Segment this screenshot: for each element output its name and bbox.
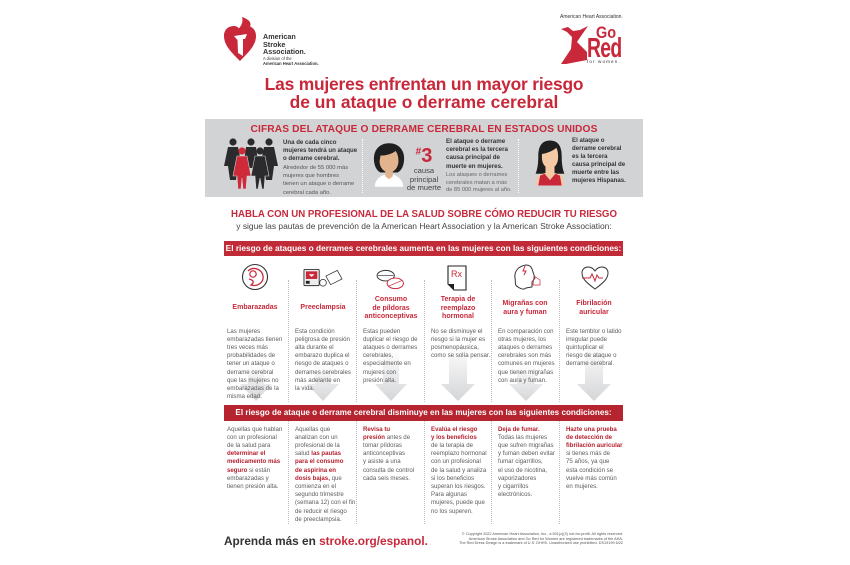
text: aquellas que hablan: determinar el [227, 450, 265, 457]
stat: #3 causa principal de muerte: de muerte [407, 183, 441, 192]
text: terapia [431, 328, 490, 359]
text: presion: tomar píldoras [363, 442, 402, 449]
text: embarazadas: misma edad. [227, 393, 262, 400]
text: fibrilacion prueba: fibrilación auricular [566, 442, 623, 449]
stat detail: 55 000 mujeres: cerebral cada año. [283, 190, 331, 196]
heading: preeclampsia: Preeclampsia [300, 304, 346, 311]
text: aquellas que hablan: de la salud para [227, 442, 270, 449]
stat text: una de cada cinco: mujeres tendrá un ataque [283, 147, 357, 154]
stat text: tercera causa: cerebral es la tercera [446, 146, 508, 153]
text: aquellas que hablan [227, 426, 282, 490]
stat text: mujeres hispanas: mujeres Hispanas. [572, 177, 626, 184]
text: fibrilacion: Este temblor o latido [566, 328, 622, 334]
text: evalua: y los beneficios [431, 434, 477, 441]
title: de un ataque o derrame cerebral [290, 92, 558, 112]
subheading: habla con un profesional: HABLA CON UN PROFESIONAL DE LA SALUD SOBRE CÓMO REDUCIR TU RIESGO [231, 209, 617, 220]
copyright: American Stroke Association and Go Red for Women are registered trademarks of the AHA. [469, 537, 623, 541]
stat text: una de cada cinco: o derrame cerebral. [283, 155, 340, 162]
text: aspirina: segundo trimestre [295, 491, 344, 498]
stat: #3 causa principal de muerte: #3 [416, 145, 432, 167]
text: fumar: vaporizadores [498, 475, 536, 482]
text: pildoras: presión alta. [363, 377, 396, 384]
icon: corazon [582, 266, 608, 290]
text: fibrilacion prueba: 75 años, ya que [566, 458, 609, 465]
heading: pildoras [364, 296, 418, 320]
text: preeclampsia [295, 328, 351, 392]
text: migranas: ataques o derrames [498, 344, 552, 351]
text: embarazadas: derrame cerebral [227, 369, 273, 376]
text: pildoras [363, 328, 418, 384]
text: evalua: de la terapia de [431, 442, 473, 449]
text: fumar: el uso de nicotina, [498, 467, 547, 474]
heading: fibrilacion: Fibrilación [576, 300, 612, 307]
stat text: una de cada cinco: Una de cada cinco [283, 139, 337, 146]
text: embarazadas: tener un ataque o [227, 360, 275, 367]
stat text: mujeres hispanas [572, 137, 626, 184]
text: evalua: Para algunas [431, 491, 467, 498]
text: fumar: Deja de fumar. [498, 426, 540, 432]
text: preeclampsia: más adelante en [295, 377, 340, 384]
title [265, 74, 583, 112]
text: fibrilacion: riesgo de ataque o [566, 352, 616, 359]
stat: #3 causa principal de muerte: causa [414, 166, 434, 175]
text: fibrilacion: derrame cerebral. [566, 360, 614, 367]
text: fibrilacion: quintuplicar el [566, 344, 604, 351]
text: fumar: y fuman deben evitar [498, 450, 555, 457]
text: aquellas que hablan: Aquellas que hablan [227, 426, 282, 432]
text: fibrilacion prueba: vuelve más común [566, 475, 617, 482]
text: aspirina: (semana 12) con el fin [295, 499, 355, 506]
heading: migranas [502, 300, 548, 316]
stat detail: 85 000 mujeres: de 85 000 mujeres al año. [446, 187, 512, 193]
icon: receta [447, 266, 467, 290]
text: migranas: En comparación con [498, 328, 554, 334]
heading: embarazadas: Embarazadas [232, 304, 278, 311]
text: terapia: No se disminuye el [431, 328, 482, 334]
stat text: mujeres hispanas: es la tercera [572, 153, 608, 160]
stat text: mujeres hispanas: causa principal de [572, 161, 625, 168]
text: aquellas que hablan: seguro si están [227, 467, 270, 474]
logo: American Stroke Association: American [263, 32, 296, 41]
text: aspirina: dosis bajas, que [295, 475, 342, 482]
stat detail: 85 000 mujeres: Los ataques o derrames [446, 172, 507, 178]
text: aspirina: comienza en el [295, 483, 336, 490]
stat: #3 causa principal de muerte [407, 145, 441, 192]
stat detail: 55 000 mujeres: mujeres que hombres [283, 173, 339, 179]
heading: migranas: Migrañas con [502, 300, 548, 307]
text: pildoras: especialmente en [363, 360, 411, 367]
stat detail: 85 000 mujeres: cerebrales matan a más [446, 180, 507, 186]
heading: fibrilacion [576, 300, 612, 316]
heading: terapia: hormonal [442, 313, 474, 320]
footer call to action: Aprenda más en stroke.org/espanol. [224, 534, 428, 548]
icon: preeclampsia [303, 269, 342, 286]
text: migranas: otras mujeres, los [498, 336, 546, 343]
stat detail: 55 000 mujeres: Alrededor de 55 000 más [283, 165, 348, 171]
text: embarazadas: Las mujeres [227, 328, 260, 334]
text: fumar: y cigarrillos [498, 483, 528, 490]
text: aquellas que hablan: medicamento más [227, 458, 280, 465]
red banner: disminuye: El riesgo de ataque o derrame cerebral disminuye en las mujeres con las siguientes condiciones: [235, 408, 612, 417]
text: aspirina: analizan con un [295, 434, 338, 441]
text: fibrilacion prueba: en mujeres. [566, 483, 598, 490]
stat: #3 causa principal de muerte: principal [410, 174, 438, 184]
heading: terapia: reemplazo [441, 305, 475, 312]
text: fumar: Todas las mujeres [498, 434, 547, 441]
text: preeclampsia: derrames cerebrales [295, 369, 351, 376]
icon: woman with dark hair [374, 143, 404, 187]
stat text: tercera causa: causa principal de [446, 154, 500, 161]
text: embarazadas [227, 328, 282, 400]
subheading text: y sigue las pautas de prevención de la American Heart Association y la American Stroke Association: [236, 221, 612, 231]
text: terapia: como se solía pensar. [431, 352, 490, 359]
icon: group of women [224, 138, 278, 189]
logo: American Stroke Association: American Heart Association. [263, 61, 319, 66]
text: evalua: Evalúa el riesgo [431, 426, 477, 432]
logo: Go Red for Women: Red [587, 32, 621, 63]
logo: American Stroke Association: Stroke [263, 40, 285, 49]
logo: Go Red for Women: American Heart Association. [560, 14, 623, 20]
text: presion [363, 426, 414, 482]
heading: pildoras: anticonceptivas [365, 313, 417, 320]
stat text: mujeres hispanas: El ataque o [572, 137, 605, 144]
text: aspirina: profesional de la [295, 442, 340, 449]
text: migranas [498, 328, 555, 384]
text: fibrilacion prueba: de detección de [566, 434, 612, 441]
text: presion: anticonceptivas [363, 450, 405, 457]
text: evalua: superan los riesgos. [431, 483, 486, 490]
logo: Go Red for Women: for women. [587, 59, 621, 64]
text: evalua: reemplazo hormonal [431, 450, 487, 457]
text: pildoras: Estas pueden [363, 328, 400, 334]
icon: receta: Rx [451, 269, 462, 279]
text: aspirina: Aquellas que [295, 426, 330, 432]
text: evalua [431, 426, 487, 515]
icon: embarazadas [242, 264, 268, 290]
stat detail: 55 000 mujeres [283, 165, 354, 196]
text: evalua: no los superen. [431, 508, 473, 515]
stat detail: 85 000 mujeres [446, 172, 512, 193]
text: fibrilacion [566, 328, 622, 367]
heading: terapia [440, 296, 475, 320]
text: preeclampsia: riesgo de ataques o [295, 360, 349, 367]
stat text: tercera causa: El ataque o derrame [446, 138, 505, 145]
text: pildoras: mujeres con [363, 369, 396, 376]
text: preeclampsia: peligrosa de presión [295, 336, 350, 343]
text: aspirina: de reducir el riesgo [295, 508, 347, 515]
text: presion: consulta de control [363, 467, 414, 474]
text: terapia: riesgo si la mujer es [431, 336, 485, 343]
text: aspirina: para el consumo [295, 458, 343, 465]
logo: Go Red for Women [560, 14, 623, 64]
text: aquellas que hablan: con un profesional [227, 434, 277, 441]
heading: pildoras: de píldoras [372, 305, 410, 312]
text: migranas: que tienen migrañas [498, 369, 553, 376]
text: pildoras: ataques o derrames [363, 344, 417, 351]
stat text: mujeres hispanas: muerte entre las [572, 169, 619, 176]
panel: cifras [205, 119, 643, 197]
stat text: tercera causa: muerte en mujeres. [446, 163, 503, 170]
heading: terapia: Terapia de [441, 296, 475, 303]
stat text: tercera causa [446, 138, 508, 170]
icon: Hispanic woman in red [536, 140, 564, 186]
text: presion: Revisa tu [363, 426, 390, 432]
text: fumar [498, 426, 555, 498]
heading: migranas: aura y fuman [503, 309, 547, 316]
text: fumar: que sufren migrañas [498, 442, 554, 449]
text: fibrilacion prueba: esta condición se [566, 467, 613, 474]
text: preeclampsia: Esta condición [295, 328, 335, 334]
text: evalua: de la salud y analiza [431, 467, 486, 474]
text: presion: presión antes de [363, 434, 410, 441]
text: fumar: fumar cigarrillos, [498, 458, 543, 465]
logo: American Stroke Association [224, 17, 319, 66]
logo: Go Red for Women: Go [596, 23, 616, 42]
text: fibrilacion prueba: si tienes más de [566, 450, 610, 457]
text: pildoras: duplicar el riesgo de [363, 336, 418, 343]
red banner: disminuye [224, 405, 623, 421]
text: terapia: posmenopáusica, [431, 344, 479, 351]
icon: migrana [514, 264, 540, 290]
text: preeclampsia: embarazo duplica el [295, 352, 350, 359]
text: aquellas que hablan: embarazadas y [227, 475, 269, 482]
text: evalua: mujeres, puede que [431, 499, 485, 506]
copyright: © Copyright 2022 American Heart Association, Inc., a 501(c)(3) not-for-profit. All rights reserved. [462, 532, 623, 536]
stat text: una de cada cinco [283, 139, 357, 162]
text: evalua: si los beneficios [431, 475, 474, 482]
red banner: aumenta [224, 241, 623, 256]
stat text: mujeres hispanas: derrame cerebral [572, 145, 621, 152]
text: migranas: cerebrales son más [498, 352, 551, 359]
text: embarazadas: embarazadas de la [227, 385, 279, 392]
text: aspirina: salud las pautas [295, 450, 341, 457]
heading: fibrilacion: auricular [579, 309, 609, 316]
title: Las mujeres enfrentan un mayor riesgo [265, 74, 583, 94]
stat detail: 55 000 mujeres: tienen un ataque o derrame [283, 181, 354, 187]
logo: American Stroke Association: Association. [263, 47, 306, 56]
text: evalua: con un profesional [431, 458, 481, 465]
text: preeclampsia: la vida. [295, 385, 314, 392]
heading: pildoras: Consumo [375, 296, 407, 303]
text: fibrilacion prueba [566, 426, 623, 490]
text: aspirina: de aspirina en [295, 467, 336, 474]
text: fibrilacion: irregular puede [566, 336, 607, 343]
text: embarazadas: embarazadas tienen [227, 336, 282, 343]
logo: American Stroke Association: A division of the [263, 56, 292, 61]
text: migranas: con aura y fuman. [498, 377, 547, 384]
text: pildoras: cerebrales, [363, 352, 393, 359]
text: aspirina [295, 426, 355, 523]
text: aquellas que hablan: tienen presión alta. [227, 483, 278, 490]
text: fumar: electrónicos. [498, 491, 532, 498]
text: presion: y asiste a una [363, 458, 401, 465]
text: preeclampsia: alta durante el [295, 344, 334, 351]
text: embarazadas: tres veces más [227, 344, 268, 351]
text: embarazadas: probabilidades de [227, 352, 275, 359]
icon: pildoras [376, 270, 404, 290]
copyright [459, 532, 623, 545]
text: presion: cada seis meses. [363, 475, 410, 482]
red banner: aumenta: El riesgo de ataques o derrames cerebrales aumenta en las mujeres con las siguientes condiciones: [226, 243, 621, 253]
copyright: The Red Dress Design is a trademark of U.S. DHHS. Unauthorized use prohibited. DS19199 6/22 [459, 541, 623, 545]
text: aspirina: de preeclampsia. [295, 516, 341, 523]
text: fibrilacion prueba: Hazte una prueba [566, 426, 617, 432]
text: embarazadas: que las mujeres no [227, 377, 278, 384]
panel heading: CIFRAS DEL ATAQUE O DERRAME CEREBRAL EN ESTADOS UNIDOS [250, 124, 598, 135]
text: migranas: comunes en mujeres [498, 360, 555, 367]
